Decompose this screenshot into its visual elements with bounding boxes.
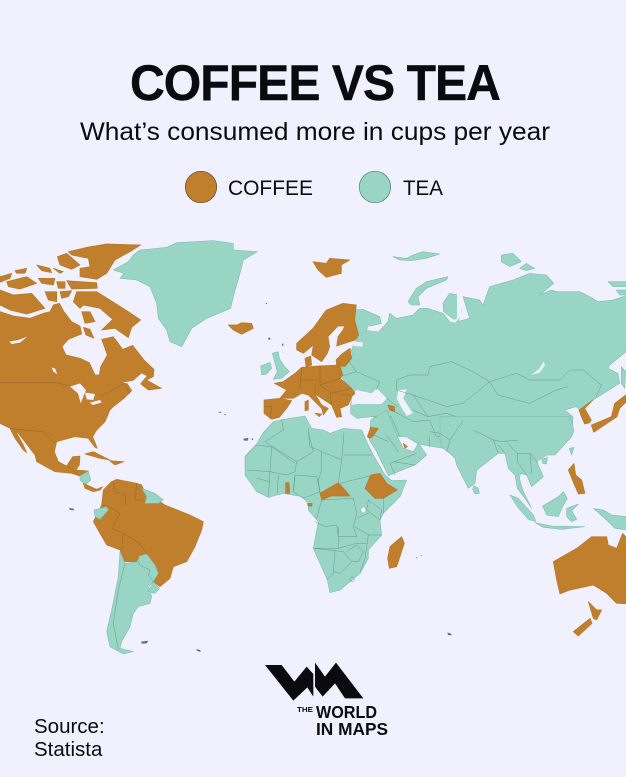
Sumatra	[510, 495, 536, 522]
Java and Lesser Sundas	[535, 523, 585, 529]
Israel and Jordan	[367, 427, 378, 438]
Central African Republic	[320, 483, 350, 500]
map: Europe and Mediterranean	[261, 352, 355, 419]
Taiwan	[569, 447, 574, 455]
Cuba	[85, 452, 110, 460]
map: Africa and Arabia	[245, 410, 427, 593]
Northern South America and Brazil	[93, 479, 203, 587]
Denmark	[305, 356, 312, 367]
logo wordmark: WORLD	[316, 702, 377, 722]
Chile, Argentina and Paraguay	[107, 552, 158, 654]
Central Europe, Italy and Balkans	[274, 365, 355, 417]
Qatar	[403, 443, 407, 448]
Falkland Islands	[141, 641, 148, 644]
legend: tea	[359, 171, 444, 203]
Armenia	[388, 405, 395, 412]
Ghana	[286, 483, 290, 493]
Atlantic islets	[218, 303, 284, 441]
Canadian islands	[0, 244, 141, 338]
Philippines	[568, 463, 585, 494]
Hainan	[542, 457, 547, 464]
Ireland	[261, 362, 272, 375]
Russian Arctic islands	[393, 252, 626, 388]
Norway, Sweden and Finland	[297, 303, 359, 362]
Africa continent	[245, 416, 407, 593]
Guyana, Suriname and French Guiana	[142, 488, 163, 503]
logo wordmark	[297, 702, 388, 739]
Greenland	[113, 241, 257, 347]
map: North Atlantic and North America	[0, 241, 284, 492]
Equatorial Guinea	[308, 503, 312, 506]
Sardinia and Corsica	[305, 400, 308, 411]
Indian Ocean islets	[416, 555, 452, 635]
Panama	[83, 483, 103, 492]
logo wordmark: THE	[297, 705, 313, 714]
Canada, USA, Mexico and northern Central America	[0, 303, 161, 476]
USA, Canada and Mexico borders	[0, 383, 130, 476]
Great Lakes and inland water	[9, 337, 147, 405]
South Atlantic islets	[69, 508, 201, 652]
Sulawesi	[567, 504, 578, 522]
legend: coffee	[185, 171, 313, 203]
Svalbard	[313, 258, 350, 277]
logo: The World in Maps	[265, 663, 388, 739]
legend: coffee: COFFEE	[228, 176, 313, 200]
Spain and Portugal	[264, 398, 292, 419]
Costa Rica and Nicaragua	[80, 471, 91, 485]
logo wordmark: IN MAPS	[316, 719, 388, 739]
Sri Lanka	[473, 486, 479, 494]
Korea	[579, 400, 593, 424]
Iceland	[228, 323, 253, 334]
South Asian borders	[430, 420, 538, 475]
Chile and Paraguay borders	[113, 562, 153, 650]
source note: Source:	[34, 715, 105, 738]
title: COFFEE VS TEA	[130, 54, 500, 111]
Caspian Sea	[397, 389, 413, 416]
Japan	[591, 393, 626, 432]
Hispaniola	[109, 461, 124, 465]
Russia and northern Asia	[340, 273, 626, 448]
New Zealand	[573, 602, 602, 636]
India, Indochina and south China	[440, 417, 574, 508]
world map	[0, 241, 626, 654]
logo mark	[265, 663, 363, 701]
New Guinea	[593, 508, 626, 530]
Borneo	[543, 492, 567, 517]
legend: tea: TEA	[403, 176, 444, 200]
South American borders	[102, 482, 147, 554]
Lake Baikal and northern seas	[354, 293, 545, 375]
map: Australia and New Zealand	[416, 533, 626, 636]
Ecuador	[94, 507, 108, 519]
African borders	[245, 419, 417, 580]
map: South and Southeast Asia	[430, 417, 626, 530]
Baltic states	[336, 348, 352, 367]
map: Eurasia	[297, 252, 626, 448]
source note: Statista	[34, 738, 103, 761]
Australia	[553, 533, 626, 604]
Ethiopia	[365, 473, 397, 498]
Arabian Peninsula and Levant	[369, 410, 427, 476]
Lesotho	[350, 577, 354, 582]
Asian borders	[340, 360, 601, 447]
source note	[34, 715, 105, 761]
Sicily	[315, 413, 322, 417]
Uruguay	[148, 582, 159, 593]
legend	[185, 171, 444, 203]
Lake Victoria	[361, 507, 366, 513]
map: South America	[69, 479, 203, 654]
subtitle: What’s consumed more in cups per year	[80, 118, 550, 146]
Black Sea	[352, 388, 387, 405]
Madagascar	[388, 537, 404, 568]
European borders	[265, 366, 352, 418]
UK	[272, 352, 289, 379]
